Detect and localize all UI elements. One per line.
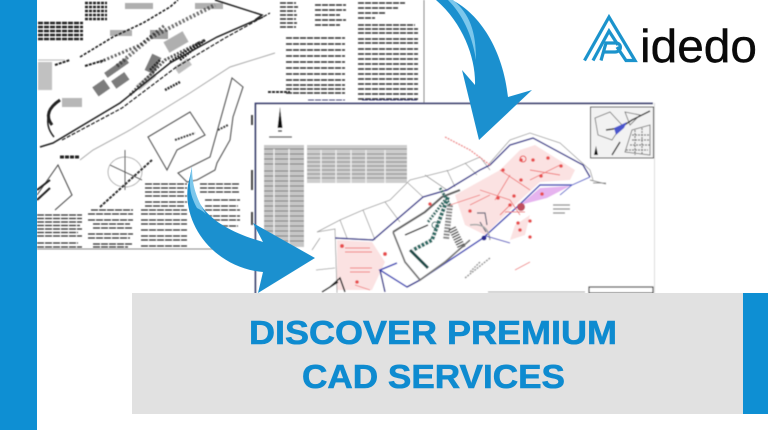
gray boundary road and parcels [37,53,290,210]
title block box [589,287,653,293]
site plan: junction details [322,180,606,292]
site plan: navy property boundary [335,138,590,292]
site plan: gray parcel outlines [312,133,593,293]
arrow: lower curved arrow [187,167,315,293]
site plan: red markers [340,156,563,284]
heading: cad services: CAD SERVICES [302,358,565,395]
sheet frame [256,104,653,295]
table blocks: upper left [38,3,107,39]
drawing: upper road corridor [38,0,270,147]
site plan: pink development zones [337,145,575,290]
panel: right CAD site plan sheet [256,103,654,298]
logo: Aidedo [584,17,757,72]
arrow: top curved arrow [436,0,532,140]
icon: north arrow [269,107,292,137]
inset location map [590,107,654,158]
title ticks [251,115,253,225]
icon: logo triangle mark [584,17,635,60]
table: curve data [264,145,304,247]
panel: left CAD drawing sheet [37,0,424,249]
site plan: magenta strip [520,186,570,205]
drawing: building cluster [38,3,223,107]
sheet edges [37,0,424,249]
logo wordmark: idedo [640,20,757,72]
site plan: teal building cluster [393,188,490,280]
panel: left blue bar [0,0,37,430]
panel: headline band [132,293,743,414]
panel: right blue accent [743,293,768,414]
table: line data [307,145,407,183]
legend and notes blocks: upper right of sheet [280,3,418,100]
heading: discover premium: DISCOVER PREMIUM [249,314,617,351]
note text blocks: lower sheet [37,184,240,247]
site plan: red utility lines [345,137,560,290]
sheet background [256,104,654,298]
